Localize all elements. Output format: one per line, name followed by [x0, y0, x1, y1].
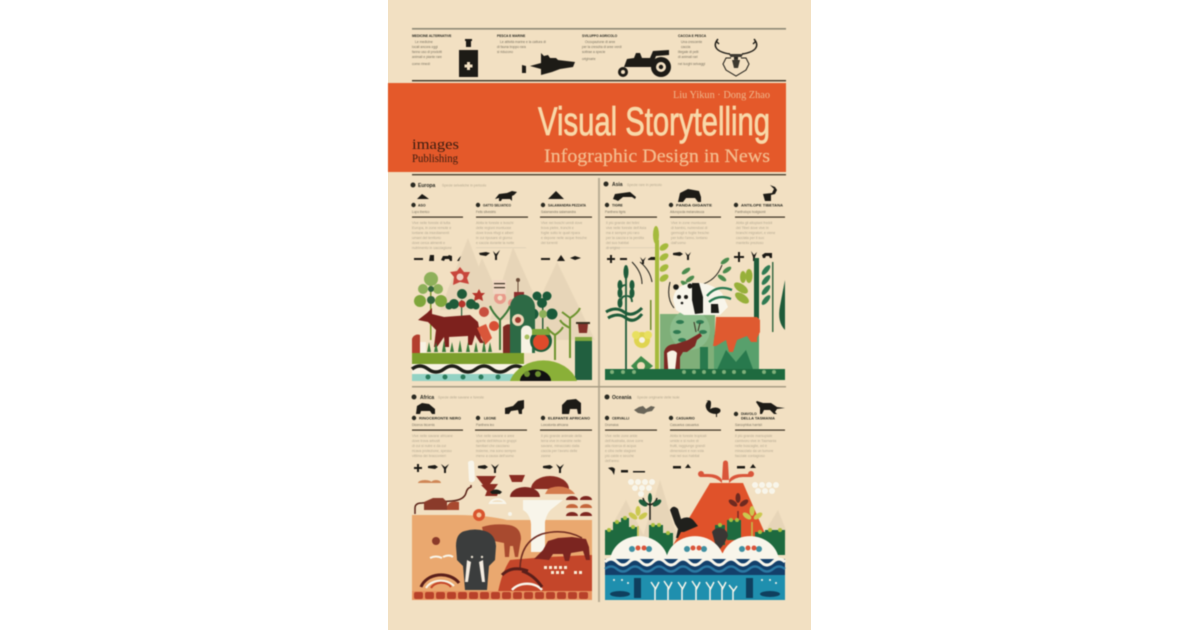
panel: Europe	[410, 182, 595, 381]
Oceania species columns: Abita le foreste tropicali	[670, 434, 707, 438]
mountains	[440, 238, 595, 340]
Africa species columns: familiari che cacciano	[476, 444, 510, 448]
Europe species columns	[411, 191, 592, 261]
Oceania species columns: Vive nelle zone aride	[605, 434, 637, 438]
orange animal	[713, 317, 760, 352]
Asia species columns: del suo habitat	[606, 241, 629, 245]
ground grass	[605, 369, 785, 380]
orange title band	[388, 83, 786, 172]
panda	[673, 283, 732, 315]
Africa species columns: aperte dell'Africa in gruppi	[476, 439, 517, 443]
top strip: text blocks: animali e piante rare	[412, 55, 442, 59]
top strip: text blocks: di fauna troppo rara	[497, 45, 526, 49]
Asia species columns	[605, 185, 785, 264]
rust tomato and arch	[412, 294, 552, 355]
Oceania species columns: frutti, raggiunge grandi	[670, 444, 705, 448]
sea	[605, 559, 785, 600]
top strip: text blocks: caccia	[681, 45, 691, 49]
top strip: text blocks: fanno uso di prodotti	[412, 50, 442, 54]
Oceania species columns: carnivoro vive in Tasmania	[735, 439, 776, 443]
Africa species columns: vittima dei bracconieri	[412, 454, 446, 458]
top strip: text blocks: Le medicine	[415, 40, 433, 44]
Asia species columns: per tutto l'anno, lontano	[671, 236, 708, 240]
Africa species columns: Vive nelle savane e aree	[476, 434, 514, 438]
Europe species columns: umani del territorio	[412, 236, 441, 240]
Asia species columns: ANTILOPE TIBETANA	[741, 204, 784, 208]
Oceania species columns: Casuarius casuarius	[670, 423, 699, 427]
top strip: text blocks: PESCA E MARINE	[497, 34, 526, 38]
white marks	[544, 566, 582, 574]
Asia species columns: Il più grande dei felini	[606, 221, 639, 225]
volcano	[673, 483, 770, 553]
panel: Oceania	[604, 394, 786, 600]
Asia species columns: Panthera tigris	[605, 210, 626, 214]
top strip: text blocks: Le attività marine e la cattura di	[500, 40, 546, 44]
Africa species columns: zanne	[541, 454, 551, 458]
Africa species columns	[412, 399, 592, 473]
Africa species columns: di cui si nutre e da cui	[412, 444, 446, 448]
top strip: text blocks: si riducono	[497, 50, 513, 54]
top strip: rules	[412, 28, 786, 175]
Oceania species columns: e cibo nelle stagioni	[605, 449, 636, 453]
Oceania species columns: dell'Australia, dove corre	[605, 439, 643, 443]
Oceania heading: Specie originarie delle isole	[637, 396, 680, 400]
Africa heading: Africa	[420, 395, 434, 401]
Asia species columns: cacciata per il suo	[736, 236, 764, 240]
Asia species columns: vive nelle foreste dell'Asia	[606, 226, 646, 230]
savanna land	[412, 460, 592, 592]
Oceania species columns: DELLA TASMANIA	[741, 416, 776, 420]
Asia species columns: Vive in zone montuose	[671, 221, 706, 225]
Oceania species columns: dimensioni e non vola	[670, 449, 704, 453]
Asia heading: Specie rare in pericolo	[627, 183, 662, 187]
top strip: text blocks: illegale di pelli	[678, 50, 699, 54]
Africa species columns: terra vive in mandrie nelle	[541, 439, 581, 443]
top strip: text blocks: di animali rari	[678, 55, 698, 59]
Africa species columns: ELEFANTE AFRICANO	[548, 416, 590, 420]
Africa species columns: dove trova arbusti	[412, 439, 440, 443]
antelope	[664, 322, 702, 380]
icon: bottle	[459, 39, 478, 77]
Europe species columns: in cui riposare di giorno	[476, 236, 512, 240]
Europe species columns: Salamandra salamandra	[541, 210, 576, 214]
lower right red ground	[498, 555, 592, 592]
Africa species columns: ricava protezione, spesso	[412, 449, 452, 453]
Africa species columns: meno a causa dell'uomo	[476, 454, 514, 458]
Oceania species columns: Sarcophilus harrisii	[735, 423, 762, 427]
devil	[712, 528, 728, 549]
Africa species columns: LEONE	[484, 416, 497, 420]
Africa species columns: Vive nelle savane africane	[412, 434, 453, 438]
Africa species columns: caccia per l'avorio delle	[541, 449, 577, 453]
Europe heading: Specie selvatiche in pericolo	[442, 184, 486, 188]
Oceania species columns: nelle boscaglie, ed è	[735, 444, 767, 448]
fox	[418, 308, 484, 347]
Oceania heading: Oceania	[612, 395, 632, 401]
background hills	[604, 480, 786, 540]
Oceania heading	[604, 394, 680, 401]
Asia species columns: ma è sempre più raro	[606, 231, 639, 235]
Europe species columns: trova pietre, tronchi e	[541, 226, 574, 230]
flowers and stars	[450, 267, 530, 350]
Africa heading: Specie delle savane e foreste	[438, 396, 484, 400]
fish and reef shapes	[610, 578, 780, 598]
top strip: text blocks: Occupazione di aree	[585, 40, 615, 44]
trees	[414, 272, 558, 340]
Europe species columns: dei torrenti	[541, 241, 558, 245]
book cover	[388, 0, 811, 630]
Europe heading: Europa	[418, 183, 435, 189]
eruption	[698, 460, 754, 483]
Europe species columns: Vive nelle foreste di tutta	[412, 221, 450, 225]
Europe species columns: Felis silvestris	[476, 210, 496, 214]
Africa species columns: Il più grande animale della	[541, 434, 582, 438]
Oceania species columns: Dromaius	[605, 423, 619, 427]
smoke clouds	[628, 479, 779, 497]
green columns	[605, 516, 785, 558]
Africa species columns: insieme, ma sono sempre	[476, 449, 516, 453]
Africa species columns: savane, minacciato dalla	[541, 444, 579, 448]
Asia species columns: per la caccia e la perdita	[606, 236, 644, 240]
yellow flower	[632, 331, 652, 348]
huts and plateaus	[424, 475, 592, 516]
top strip: text blocks: sottrae a specie	[582, 50, 605, 54]
publisher logo: Publishing	[412, 153, 458, 165]
Africa species columns: Loxodonta africana	[541, 423, 568, 427]
rhino	[520, 532, 590, 570]
Europe species columns: dove cerca alimenti e	[412, 241, 445, 245]
Asia species columns: del Tibet dove vive in	[736, 226, 769, 230]
top strip: text blocks: CACCIA E PESCA	[678, 34, 707, 38]
Oceania species columns: alla ricerca di acqua	[605, 444, 636, 448]
top strip: text blocks	[412, 34, 707, 66]
horn arcs	[421, 569, 542, 590]
Oceania species columns: minacciato da un tumore	[735, 449, 773, 453]
publisher logo	[412, 137, 459, 165]
icon: tractor	[618, 50, 671, 77]
publisher logo: images	[412, 137, 459, 153]
Oceania species columns: umide e si nutre di	[670, 439, 699, 443]
dome ornaments	[629, 546, 762, 552]
Asia heading	[604, 182, 662, 188]
Asia species columns: dall'uomo	[671, 241, 686, 245]
corals	[651, 581, 737, 600]
Asia species columns: di bambù, nutrendosi di	[671, 226, 708, 230]
Oceania species columns: mai nel suo habitat	[670, 454, 699, 458]
rust elephant	[482, 524, 521, 557]
top strip: text blocks: per la crescita di aree verdi	[582, 45, 622, 49]
Asia species columns: PANDA GIGANTE	[676, 204, 713, 208]
authors: Liu Yikun · Dong Zhao	[673, 90, 770, 101]
Oceania species columns: Il più grande marsupiale	[735, 434, 772, 438]
Europe species columns: dove trova rifugi e alberi	[476, 231, 514, 235]
Europe species columns: nutrimento in cacciagione	[412, 246, 452, 250]
Asia species columns: Ailuropoda melanoleuca	[670, 210, 704, 214]
white domes	[610, 536, 779, 562]
top strip: text blocks: originarie	[582, 57, 596, 61]
Asia species columns: di origine	[606, 246, 620, 250]
baobab	[523, 500, 563, 552]
Europe species columns: GATTO SELVATICO	[483, 204, 511, 208]
Oceania species columns: DIAVOLO	[741, 412, 757, 416]
round emblem	[631, 356, 653, 376]
top strip: text blocks: SVILUPPO AGRICOLO	[582, 34, 618, 38]
panel dividers	[412, 178, 786, 602]
Oceania species columns: dell'anno	[605, 459, 619, 463]
Oceania species columns: CASUARIO	[676, 416, 695, 420]
Asia species columns: TIGRE	[612, 204, 623, 208]
Europe heading	[410, 182, 486, 189]
tall plants	[606, 226, 785, 380]
Europe species columns: e depone nelle acque fresche	[541, 236, 587, 240]
Europe species columns: lontane da insediamenti	[412, 231, 449, 235]
Europe species columns: e caccia durante la notte	[476, 241, 514, 245]
panel: Africa	[412, 394, 592, 600]
Asia species columns: germogli e foglie fresche	[671, 231, 709, 235]
Europe species columns: Vive nei boschi umidi dove	[541, 221, 582, 225]
Oceania species columns: più calde e secche	[605, 454, 634, 458]
dark elephant	[456, 530, 496, 590]
Asia species columns: Abita gli altopiani freddi	[736, 221, 772, 225]
Asia species columns: branchi migratori, e viene	[736, 231, 775, 235]
trees	[627, 493, 764, 540]
icon: fish	[522, 53, 575, 75]
Europe species columns: Lupo iberico	[412, 210, 430, 214]
Asia species columns: Pantholops hodgsonii	[735, 210, 766, 214]
sun and seeds	[430, 509, 512, 558]
title: Visual Storytelling	[538, 100, 770, 144]
Oceania species columns: CERVALLI	[612, 416, 629, 420]
Africa species columns: Panthera leo	[476, 423, 494, 427]
top strip: text blocks: MEDICINE ALTERNATIVE	[412, 34, 452, 38]
Africa species columns: Diceros bicornis	[412, 423, 435, 427]
top strip: text blocks: locali ancora oggi	[412, 45, 438, 49]
bottom scallops	[412, 591, 592, 600]
palms and vase	[547, 308, 580, 360]
emu	[670, 507, 698, 538]
top strip: text blocks: come rimedi	[412, 62, 430, 66]
top strip: text blocks: Una crescente	[681, 40, 702, 44]
Europe species columns: Abita le foreste e boschi	[476, 221, 514, 225]
Africa heading	[412, 394, 484, 401]
ground and river	[412, 353, 577, 381]
Asia heading: Asia	[612, 182, 623, 188]
top strip: text blocks: nei luoghi selvaggi	[678, 62, 705, 66]
green background blocks	[660, 310, 759, 372]
Europe species columns: SALAMANDRA PEZZATA	[548, 204, 586, 208]
Oceania species columns: facciale contagioso	[735, 454, 765, 458]
Europe species columns: foglie sotto le quali ripara	[541, 231, 580, 235]
icon: deer head	[715, 39, 757, 76]
panel: Asia	[604, 182, 785, 380]
subtitle: Infographic Design in News	[544, 146, 770, 167]
Africa species columns: RINOCERONTE NERO	[419, 416, 461, 420]
Oceania species columns	[605, 400, 785, 475]
Europe species columns: Europa, in zone remote e	[412, 226, 451, 230]
Europe species columns: ASO	[418, 204, 426, 208]
Asia species columns: mantello prezioso	[736, 241, 763, 245]
Europe species columns: delle regioni montuose	[476, 226, 511, 230]
